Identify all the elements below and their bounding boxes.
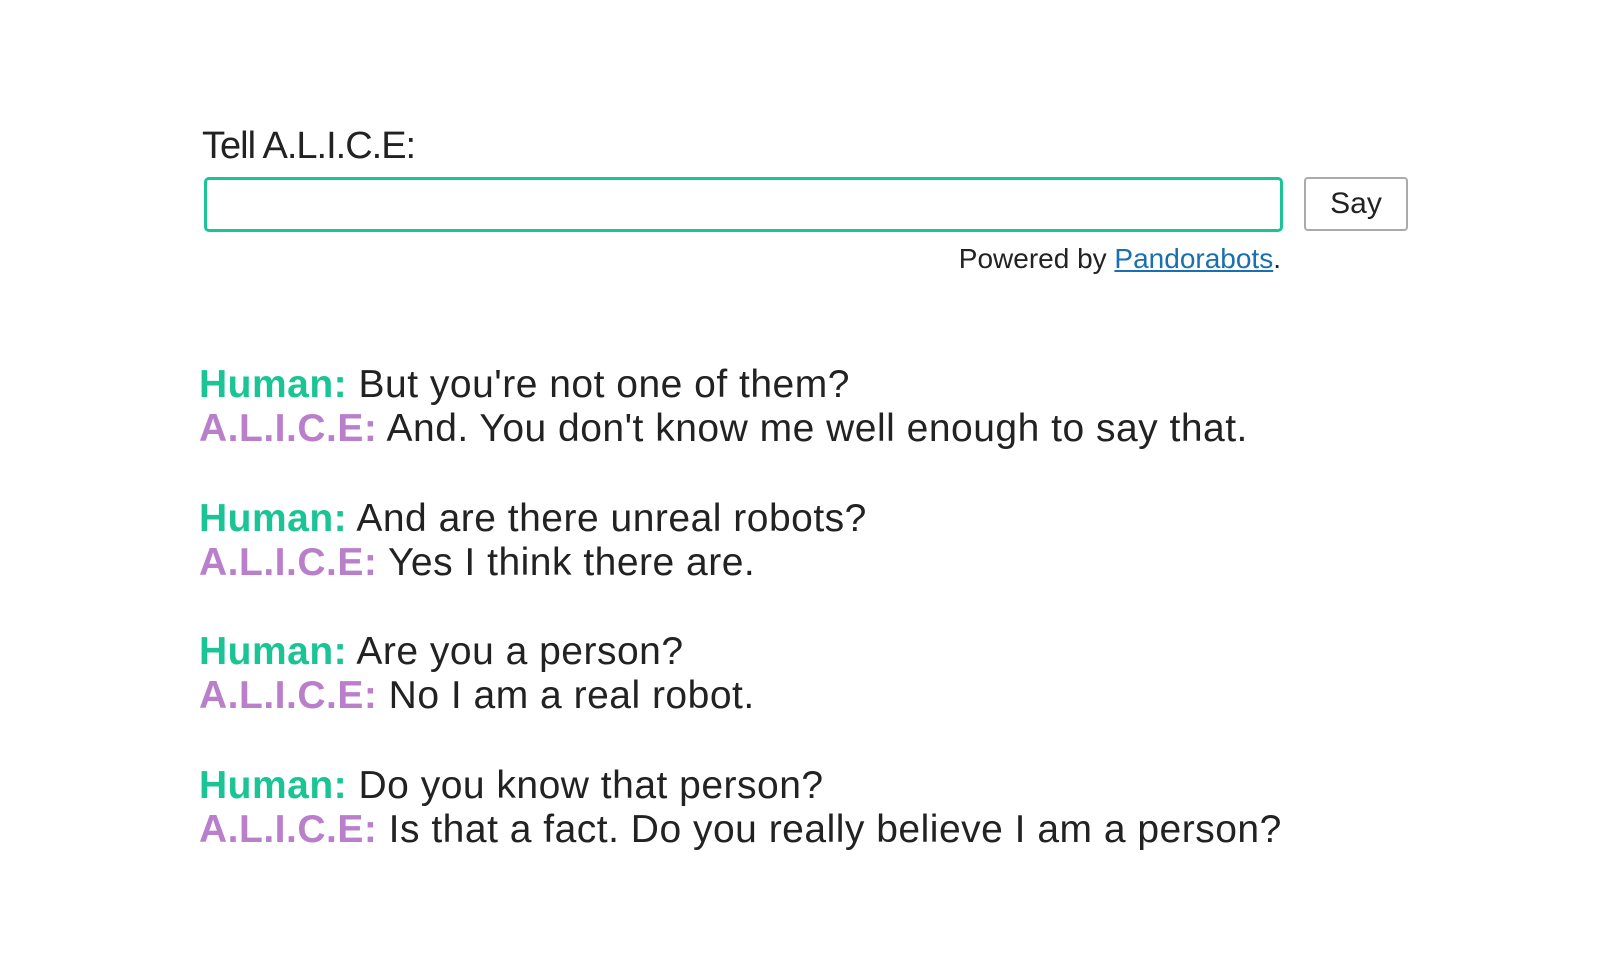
- exchange 3: Human: Are you a person?: [199, 630, 684, 673]
- powered by: Powered by Pandorabots.: [959, 243, 1281, 274]
- exchange 1: Human: But you're not one of them?: [199, 363, 850, 406]
- exchange 4: Human: Do you know that person?: [199, 764, 824, 807]
- say button: Say: [1330, 187, 1382, 220]
- exchange 3: A.L.I.C.E: No I am a real robot.: [199, 674, 755, 717]
- exchange 4: [199, 764, 1282, 851]
- exchange 2: A.L.I.C.E: Yes I think there are.: [199, 541, 755, 584]
- exchange 1: [199, 363, 1248, 450]
- exchange 2: Human: And are there unreal robots?: [199, 497, 867, 540]
- exchange 3: [199, 630, 755, 717]
- say button: [1304, 177, 1408, 231]
- exchange 1: A.L.I.C.E: And. You don't know me well enough to say that.: [199, 407, 1248, 450]
- exchange 2: [199, 497, 867, 584]
- input box: [204, 177, 1283, 232]
- title: Tell A.L.I.C.E:: [202, 125, 415, 167]
- exchange 4: A.L.I.C.E: Is that a fact. Do you really believe I am a person?: [199, 808, 1282, 851]
